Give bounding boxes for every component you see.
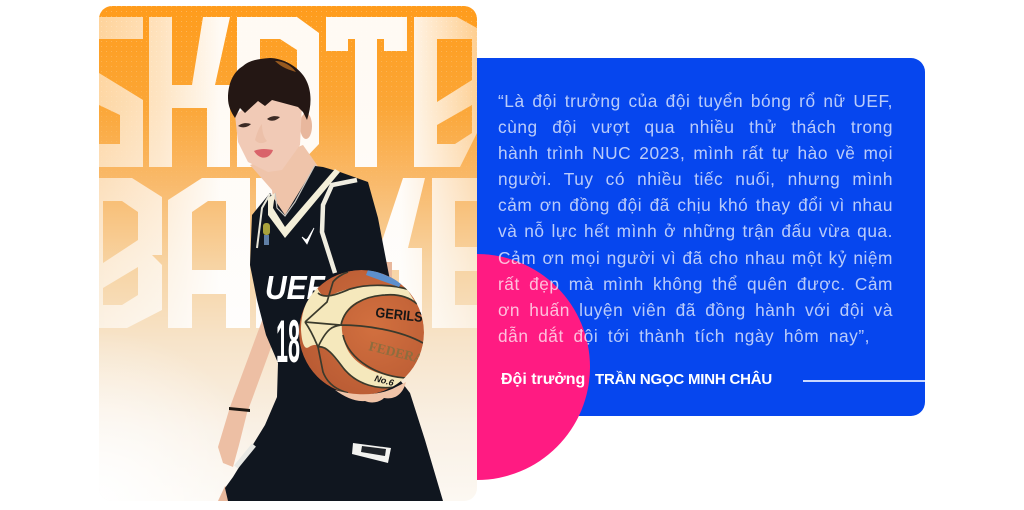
leg skin xyxy=(218,486,228,501)
ball lettering size: No.6 xyxy=(373,373,396,388)
quote text block: “Là đội trưởng của đội tuyển bóng rổ nữ UEF, xyxy=(498,91,893,111)
jersey brand mark xyxy=(302,228,314,244)
quote text block: và nỗ lực hết mình ở những trận đấu vừa qua. xyxy=(498,221,893,241)
left arm and hand xyxy=(218,318,276,467)
nose shadow xyxy=(255,124,267,143)
jersey collar trim xyxy=(268,169,340,238)
ball label xyxy=(366,270,402,287)
team badge xyxy=(263,223,270,245)
background letters: bottom row xyxy=(99,178,477,328)
quote text block: cùng đội vượt qua nhiều thử thách trong xyxy=(498,117,893,137)
wristband xyxy=(229,407,250,412)
quote text block: ơn huấn luyện viên đã đồng hành với đội và xyxy=(498,300,893,320)
attribution line xyxy=(803,380,925,382)
quote text block: Cảm ơn mọi người vì đã cho nhau một kỷ niệm xyxy=(498,248,893,268)
quote text block: dẫn dắt đội tới thành tích ngày hôm nay”, xyxy=(498,326,870,346)
neck xyxy=(250,145,322,215)
ear xyxy=(300,113,312,139)
fingers over ball xyxy=(335,382,406,402)
ball lettering GERILSP: GERILSP xyxy=(375,304,432,326)
player figure xyxy=(218,58,443,501)
panel: blue quote background xyxy=(477,58,925,416)
shorts side logo xyxy=(236,445,254,467)
right armhole stripe xyxy=(322,180,357,273)
face xyxy=(235,100,302,172)
background letters: top row xyxy=(99,17,477,167)
lips xyxy=(254,149,273,158)
right arm behind ball xyxy=(386,262,392,278)
ball cream panels xyxy=(301,285,415,388)
basketball xyxy=(299,270,433,395)
left armhole stripe xyxy=(257,194,270,248)
player figure: 18 xyxy=(276,308,300,375)
quote text block: hành trình NUC 2023, mình rất tự hào về mọi xyxy=(498,143,893,163)
attribution role: Đội trưởng xyxy=(501,371,585,388)
pink half circle xyxy=(477,254,590,480)
necklace xyxy=(275,165,315,216)
quote text block: rất đẹp mà mình không thể quên được. Cảm xyxy=(498,274,893,294)
jersey lettering UEF: UEF xyxy=(265,269,326,306)
jersey and shorts xyxy=(225,166,443,501)
photo panel: player portrait with basketball xyxy=(99,6,477,501)
hair highlight xyxy=(275,61,296,72)
quote text block xyxy=(498,91,893,346)
ball seams xyxy=(305,272,423,393)
hair xyxy=(228,58,311,120)
quote text block: người. Tuy có nhiều tiếc nuối, nhưng mình xyxy=(498,169,893,189)
attribution name: TRẦN NGỌC MINH CHÂU xyxy=(595,371,772,388)
quote text block: cảm ơn đồng đội đã chịu khó thay đổi vì nhau xyxy=(498,195,893,215)
ball lettering FEDERATION: FEDERAT xyxy=(367,338,433,368)
eyes xyxy=(238,123,251,127)
shorts label xyxy=(352,443,391,463)
